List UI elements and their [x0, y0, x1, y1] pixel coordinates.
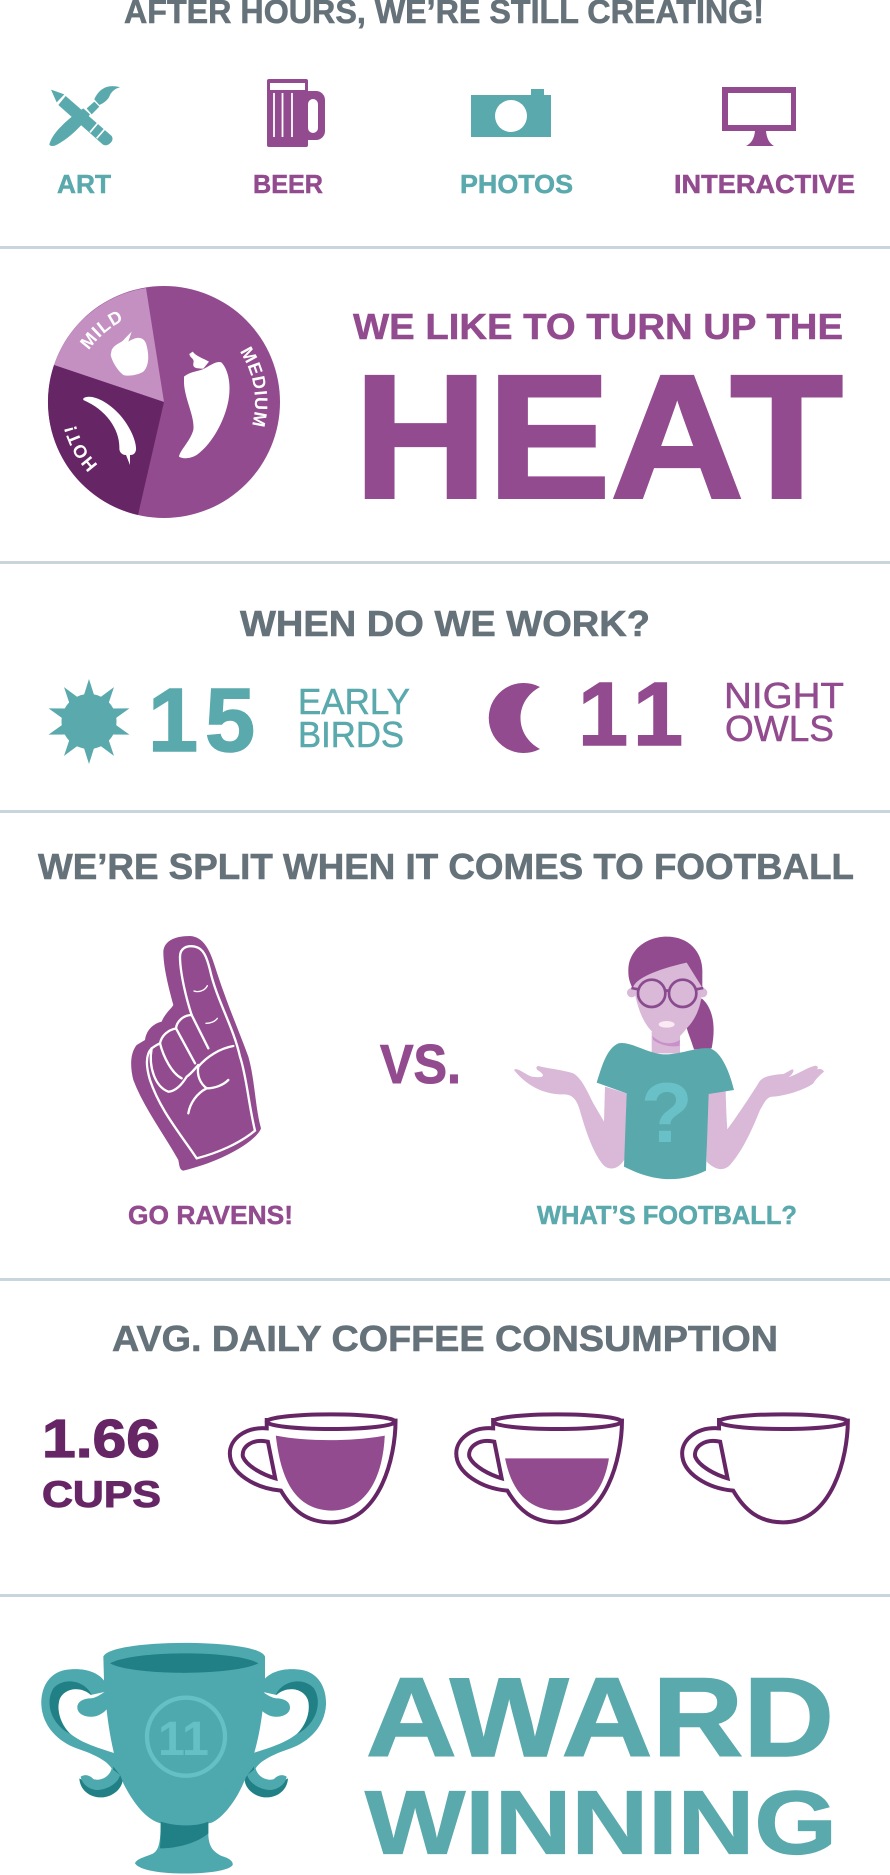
stat: 15 early birds [148, 671, 410, 771]
icon: monitor [722, 87, 796, 146]
icon: art [49, 86, 120, 146]
label: art: ART [57, 169, 111, 199]
heading: coffee: AVG. DAILY COFFEE CONSUMPTION [112, 1318, 778, 1359]
stat: 1.66 cups: 1.66 [42, 1409, 160, 1469]
chart: coffee cups [230, 1414, 848, 1522]
illustration: confused woman [514, 937, 824, 1179]
icon: beer [267, 79, 325, 147]
label: photos: PHOTOS [460, 169, 573, 199]
stat: 11 night owls: NIGHT [724, 675, 844, 716]
label: what's football: WHAT’S FOOTBALL? [537, 1200, 797, 1230]
panel: award [41, 1643, 837, 1874]
icon: camera [471, 89, 551, 137]
pie chart: pepper heat [48, 286, 280, 518]
cup 1 full [230, 1414, 396, 1522]
icon: sun [47, 679, 131, 764]
cup 2 half [456, 1414, 622, 1522]
label: go ravens: GO RAVENS! [128, 1200, 293, 1230]
stat: 11 night owls: OWLS [725, 708, 834, 749]
stat: 1.66 cups [42, 1409, 161, 1515]
heading: award: AWARD [366, 1655, 834, 1780]
stat: 15 early birds: 15 [148, 671, 255, 771]
illustration: foam finger [131, 936, 261, 1171]
heading: football: WE’RE SPLIT WHEN IT COMES TO FOOTBALL [38, 846, 854, 887]
pie chart: pepper heat: MILD [80, 312, 121, 350]
panel: football [38, 846, 854, 1230]
illustration: confused woman: ? [641, 1066, 693, 1161]
heading: we like to turn up the: WE LIKE TO TURN UP THE [353, 306, 843, 347]
icon: trophy [41, 1643, 326, 1874]
label: interactive: INTERACTIVE [674, 169, 855, 199]
stat: 11 night owls [578, 665, 844, 765]
panel: after hours [49, 0, 855, 199]
stat: 11 night owls: 11 [578, 665, 683, 765]
pie chart: pepper heat: HOT! [64, 426, 98, 472]
panel: heat [48, 286, 843, 536]
label: beer: BEER [253, 169, 323, 199]
panel: when do we work [47, 603, 844, 771]
stat: 15 early birds: BIRDS [298, 714, 404, 755]
heading: when do we work: WHEN DO WE WORK? [240, 603, 650, 644]
stat: 15 early birds: EARLY [298, 681, 410, 722]
stat: 1.66 cups: CUPS [42, 1474, 161, 1515]
cup 3 empty [682, 1414, 848, 1522]
text: vs: VS. [380, 1033, 461, 1095]
panel: coffee [42, 1318, 848, 1522]
pie chart: pepper heat: MEDIUM [240, 346, 268, 427]
heading: winning: WINNING [365, 1774, 837, 1874]
heading: heat: HEAT [354, 340, 843, 536]
icon: moon [489, 683, 540, 753]
icon: trophy: 11 [158, 1712, 209, 1766]
